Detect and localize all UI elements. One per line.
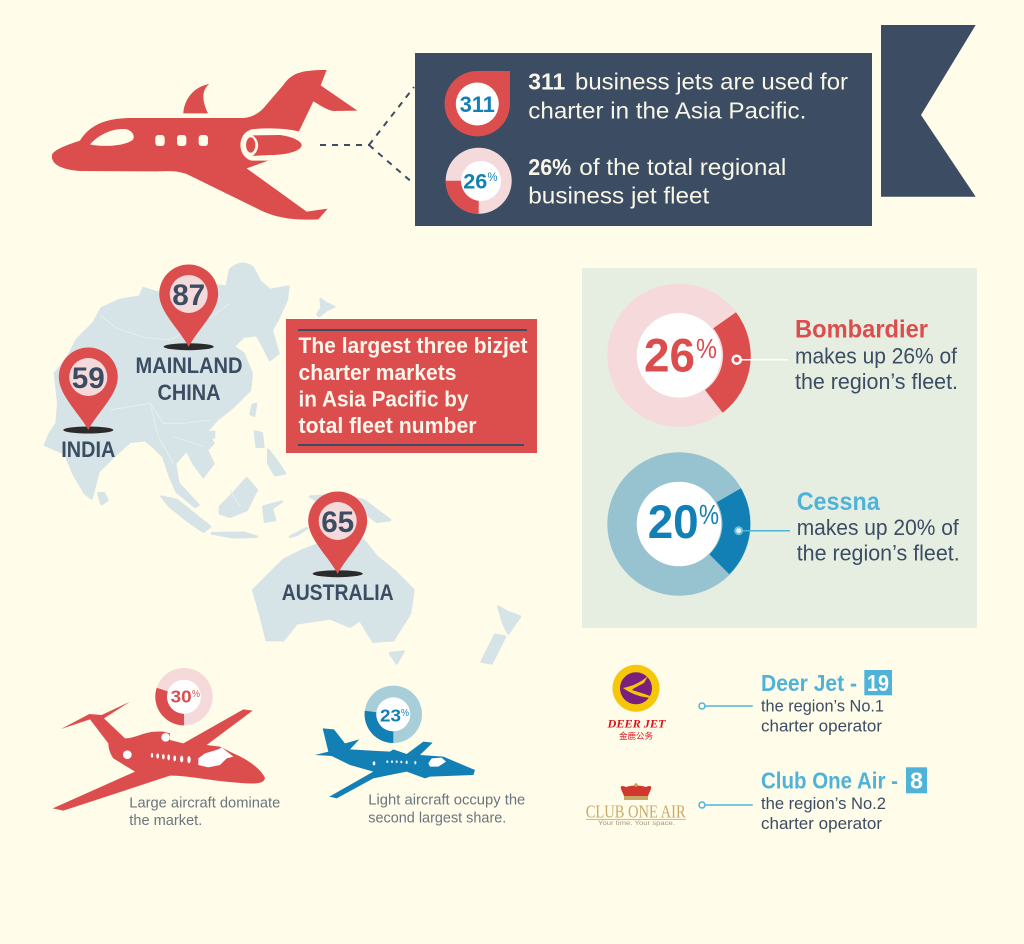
- text: Club One Air: Club One Air -: [761, 767, 898, 793]
- chart: Cessna 20% donut: 20: [648, 495, 699, 548]
- chart: Bombardier 26% donut: [607, 284, 788, 427]
- pin: Mainland China 87: [159, 264, 218, 350]
- callout: largest three markets: charter markets: [298, 360, 456, 385]
- chart: Cessna 20% donut: [607, 452, 790, 596]
- chart: 23% donut: %: [401, 708, 409, 719]
- pin: India 59: 59: [72, 362, 105, 395]
- label: Mainland China: MAINLAND: [136, 353, 242, 378]
- logo: Deer Jet: 金鹿公务: [619, 731, 653, 741]
- callout: largest three markets: total fleet number: [298, 413, 477, 438]
- text: 311 business jets: 311: [528, 68, 566, 94]
- logo: Club One Air: [586, 783, 686, 827]
- text: Cessna: the region’s fleet.: [797, 541, 960, 566]
- text: Cessna: [797, 488, 960, 566]
- text: large aircraft: Large aircraft dominate: [129, 795, 280, 811]
- pin: Mainland China 87: 87: [172, 279, 205, 312]
- chart: 23% donut: 23: [380, 706, 401, 726]
- text: 311 business jets: business jets are used for: [575, 68, 848, 94]
- icon: 311 badge: 311: [460, 92, 495, 117]
- text: 311 business jets: of the total regional: [579, 154, 786, 180]
- icon: red large aircraft: [53, 702, 265, 811]
- logo: Club One Air: CLUB ONE AIR: [586, 801, 686, 821]
- text: Club One Air: 8: [910, 767, 923, 793]
- text: light aircraft: second largest share.: [368, 810, 506, 826]
- icon: large red jet: [52, 70, 357, 220]
- decorative ribbon flag: [881, 25, 976, 197]
- text: Club One Air: the region’s No.2: [761, 795, 886, 813]
- icon: blue light aircraft: [315, 728, 475, 798]
- logo: Deer Jet: DEER JET: [606, 717, 666, 731]
- pin: India 59: [59, 348, 118, 434]
- chart: Bombardier 26% donut: 26: [644, 329, 695, 382]
- text: light aircraft: Light aircraft occupy the: [368, 792, 525, 808]
- panel: manufacturers: [582, 268, 977, 628]
- text: large aircraft: the market.: [129, 813, 202, 829]
- text: Cessna: makes up 20% of: [797, 515, 960, 540]
- pin: Australia 65: [308, 492, 367, 577]
- text: Deer Jet: Deer Jet -: [761, 670, 857, 696]
- label: Mainland China: [136, 353, 242, 405]
- icon: 311 badge: [445, 71, 510, 136]
- text: Deer Jet: [761, 670, 892, 736]
- text: Bombardier: the region’s fleet.: [795, 369, 958, 394]
- chart: 30% donut: 30: [171, 687, 192, 707]
- callout: largest three markets: [286, 319, 537, 453]
- text: 311 business jets: 26%: [528, 154, 571, 180]
- chart: 30% donut: %: [192, 689, 200, 700]
- chart: Cessna 20% donut: %: [699, 499, 719, 530]
- chart: 30% donut: [155, 668, 213, 725]
- text: Bombardier: Bombardier: [795, 316, 928, 344]
- text: large aircraft: [129, 795, 280, 829]
- label: Australia: AUSTRALIA: [282, 580, 394, 605]
- text: Club One Air: charter operator: [761, 815, 883, 833]
- map: Asia Pacific: [45, 264, 520, 663]
- text: 311 business jets: [528, 68, 848, 208]
- logo: Club One Air: Your time. Your space.: [598, 820, 675, 827]
- chart: 26% donut: [446, 148, 512, 214]
- text: Club One Air: [761, 767, 927, 833]
- label: Mainland China: CHINA: [158, 380, 221, 405]
- chart: Bombardier 26% donut: %: [696, 333, 717, 364]
- connector: Deer Jet: [699, 703, 753, 709]
- text: 311 business jets: business jet fleet: [528, 182, 710, 208]
- chart: 26% donut: 26: [463, 170, 487, 194]
- text: Deer Jet: 19: [867, 670, 889, 696]
- pin: Australia 65: 65: [321, 506, 354, 539]
- dashed connector: [320, 87, 414, 184]
- text: Deer Jet: the region’s No.1: [761, 698, 884, 716]
- text: Bombardier: [795, 316, 958, 394]
- chart: 26% donut: %: [488, 170, 498, 184]
- callout: largest three markets: The largest three bizjet: [298, 333, 528, 358]
- label: India: INDIA: [61, 437, 115, 462]
- text: light aircraft: [368, 792, 525, 826]
- text: Bombardier: makes up 26% of: [795, 343, 958, 368]
- callout: largest three markets: in Asia Pacific by: [298, 387, 469, 412]
- chart: 23% donut: [365, 686, 422, 743]
- logo: Deer Jet: [606, 665, 666, 741]
- text: 311 business jets: charter in the Asia Pacific.: [528, 97, 806, 123]
- panel: fleet summary: [415, 53, 872, 226]
- connector: Club One Air: [699, 802, 753, 808]
- text: Deer Jet: charter operator: [761, 718, 883, 736]
- text: Cessna: Cessna: [797, 488, 881, 516]
